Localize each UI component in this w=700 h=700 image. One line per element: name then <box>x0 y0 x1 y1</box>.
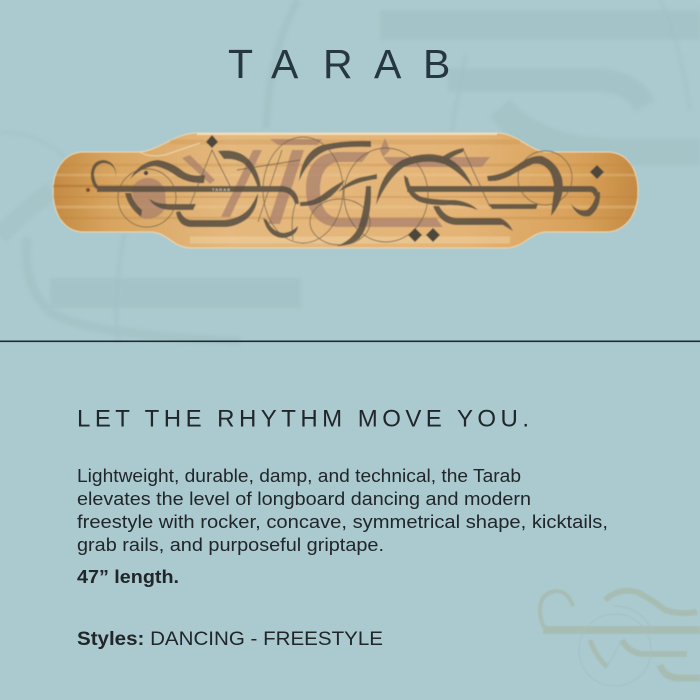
title: TARAB <box>228 41 450 87</box>
mauve graphic layer <box>131 138 490 227</box>
longboard deck <box>50 133 640 248</box>
description text: freestyle with rocker, concave, symmetrical shape, kicktails, <box>77 512 608 532</box>
dark calligraphy strokes <box>91 141 600 246</box>
divider line <box>0 340 700 342</box>
thin line circles <box>118 137 572 245</box>
small deck logo: TARAB <box>212 187 232 192</box>
description text: Lightweight, durable, damp, and technical, the Tarab <box>77 466 521 486</box>
central bar right <box>407 186 598 196</box>
background calligraphy watermark: lower right <box>540 591 700 686</box>
central bar left <box>97 186 299 204</box>
styles line: Styles: DANCING - FREESTYLE <box>77 629 383 650</box>
diamond ornaments <box>86 135 604 242</box>
wood grain <box>50 134 640 240</box>
description text: elevates the level of longboard dancing and modern <box>77 489 531 509</box>
length note: 47” length. <box>77 567 179 587</box>
background calligraphy watermark: upper panel <box>0 0 700 341</box>
heading: LET THE RHYTHM MOVE YOU. <box>77 406 529 432</box>
description text <box>77 466 608 555</box>
deck shape <box>53 133 638 248</box>
description text: grab rails, and purposeful griptape. <box>77 535 384 555</box>
